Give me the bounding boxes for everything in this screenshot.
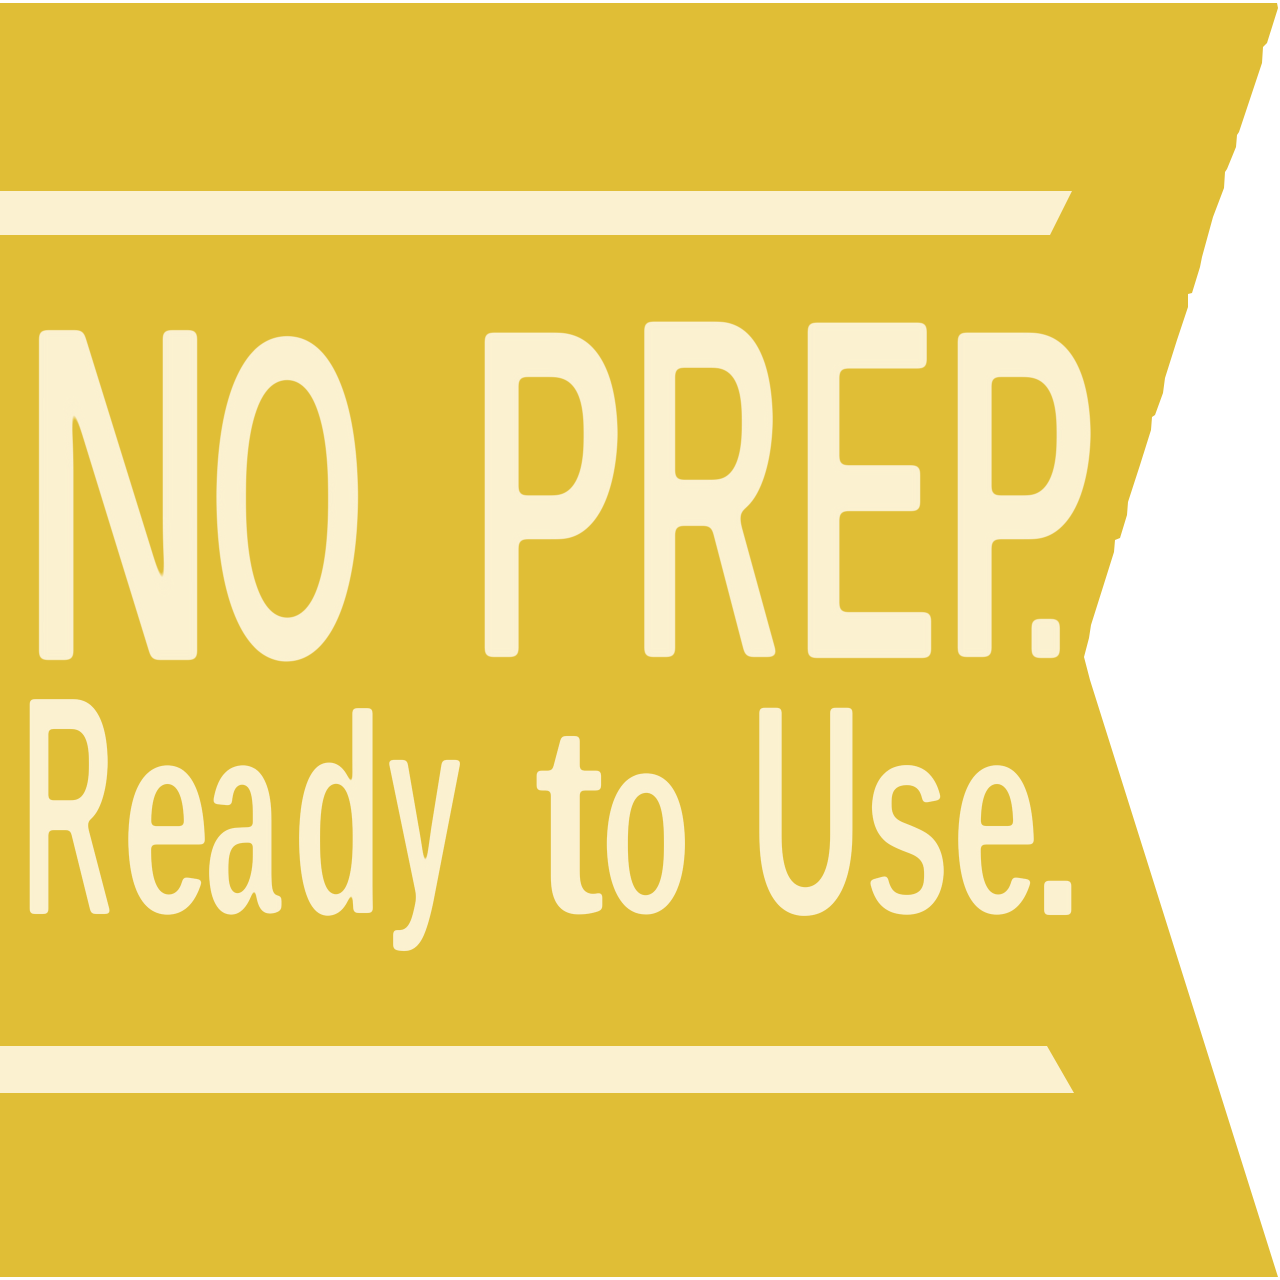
subheading: Ready to Use.: d bbox=[293, 652, 383, 978]
heading: NO PREP.: P bbox=[469, 221, 626, 765]
top cream stripe bbox=[0, 191, 1072, 235]
heading: NO PREP.: O bbox=[208, 235, 367, 763]
subheading: Ready to Use.: y bbox=[386, 657, 463, 956]
subheading: Ready to Use.: a bbox=[205, 659, 282, 976]
heading: NO PREP.: N bbox=[21, 219, 215, 771]
subheading: Ready to Use.: . bbox=[1031, 674, 1085, 976]
subheading: Ready to Use. bbox=[21, 626, 1085, 985]
subheading: Ready to Use.: s bbox=[863, 658, 950, 976]
subheading: Ready to Use.: o bbox=[601, 672, 691, 972]
heading: NO PREP. bbox=[21, 208, 1099, 771]
subheading: Ready to Use.: t bbox=[534, 662, 605, 975]
heading: NO PREP.: P bbox=[942, 221, 1099, 765]
subheading: Ready to Use.: U bbox=[750, 638, 862, 982]
subheading: Ready to Use.: e bbox=[122, 658, 210, 975]
heading: NO PREP.: E bbox=[793, 210, 940, 771]
bottom cream stripe bbox=[0, 1046, 1074, 1093]
subheading: Ready to Use.: e bbox=[952, 658, 1039, 976]
heading: NO PREP.: R bbox=[630, 208, 785, 769]
subheading: Ready to Use.: R bbox=[21, 626, 115, 985]
heading: NO PREP.: . bbox=[1018, 364, 1074, 733]
